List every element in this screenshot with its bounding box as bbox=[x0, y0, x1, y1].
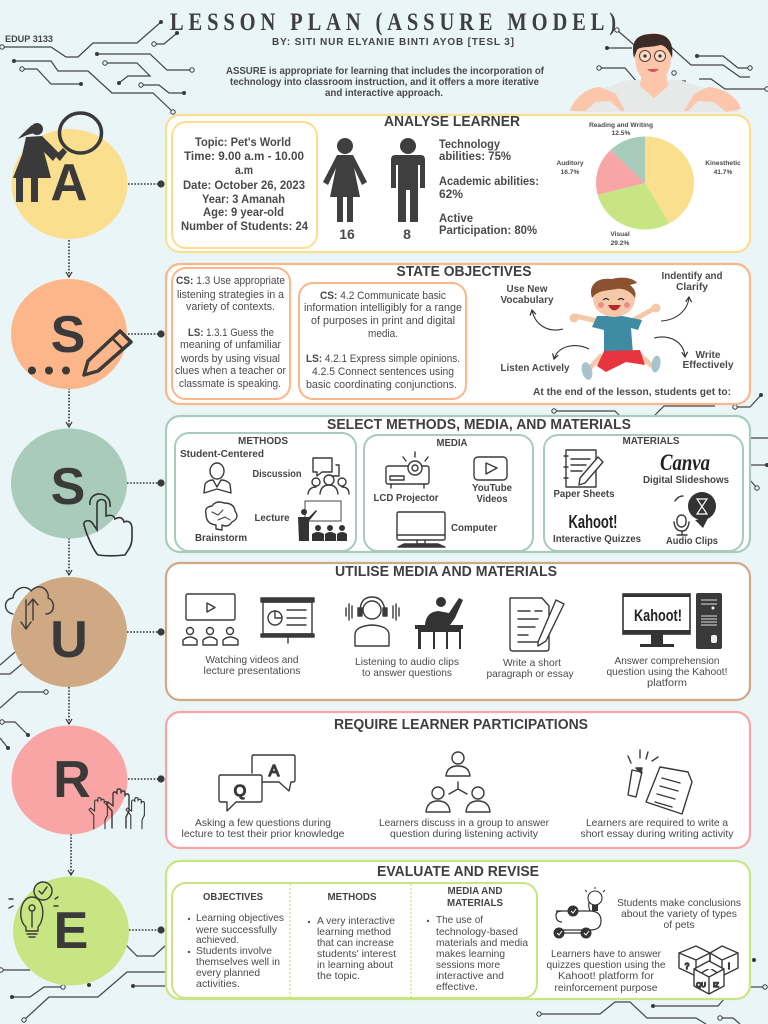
methods box: Student-Centered bbox=[180, 449, 264, 460]
pie chart: learning styles: 41.7% bbox=[714, 169, 732, 176]
objective labels: Vocabulary bbox=[500, 295, 554, 306]
evaluation table bbox=[172, 883, 537, 998]
learner abilities: 62% bbox=[439, 188, 463, 201]
icon: quiz cubes: ! bbox=[728, 962, 730, 971]
icon: projector bbox=[386, 452, 429, 488]
panel: evaluate and revise bbox=[166, 861, 750, 999]
methods box: Discussion bbox=[252, 469, 302, 480]
icon: male students 8 bbox=[391, 138, 425, 242]
column: objectives: OBJECTIVES bbox=[203, 892, 263, 903]
heading: UTILISE MEDIA AND MATERIALS bbox=[335, 564, 557, 580]
objective labels: Listen Actively bbox=[500, 363, 570, 374]
column: methods: students' interest bbox=[317, 949, 396, 960]
text: to answer questions bbox=[362, 668, 452, 679]
materials box: Interactive Quizzes bbox=[553, 534, 641, 545]
methods box: Lecture bbox=[254, 513, 290, 524]
objectives box 1: listening strategies in a bbox=[177, 289, 284, 301]
text bbox=[379, 818, 550, 840]
text: lecture to test their prior knowledge bbox=[182, 829, 345, 840]
column: media and materials: materials and media bbox=[436, 938, 528, 949]
text bbox=[580, 818, 734, 840]
media box bbox=[364, 435, 533, 551]
objectives box 2 bbox=[299, 283, 466, 399]
materials box: Audio Clips bbox=[666, 536, 718, 547]
icon: female students 16: 16 bbox=[339, 226, 355, 242]
column: objectives: Students involve bbox=[196, 946, 272, 957]
column: media and materials: sessions more bbox=[436, 960, 500, 971]
text: quizzes question using the bbox=[546, 960, 666, 971]
intro paragraph: ASSURE is appropriate for learning that includes the incorporation of bbox=[226, 66, 544, 77]
step S circle: state objectives: S bbox=[51, 306, 85, 364]
pie chart: learning styles: Auditory bbox=[556, 160, 584, 167]
intro paragraph bbox=[226, 66, 544, 99]
column: methods bbox=[308, 892, 396, 982]
pie chart: learning styles: Kinesthetic bbox=[705, 160, 741, 167]
text: of pets bbox=[664, 920, 694, 931]
objective labels: Indentify and bbox=[662, 271, 722, 282]
text: Answer comprehension bbox=[614, 656, 720, 667]
heading: STATE OBJECTIVES bbox=[396, 264, 532, 280]
icon: presentation board bbox=[261, 598, 314, 643]
objective labels: Write bbox=[696, 350, 721, 361]
column: objectives: themselves well in bbox=[196, 957, 280, 968]
intro paragraph: technology into classroom instruction, and it offers a more iterative bbox=[230, 77, 539, 88]
lesson details box: Date: October 26, 2023 bbox=[183, 179, 306, 192]
text: Learners are required to write a bbox=[586, 818, 728, 829]
intro paragraph: and interactive approach. bbox=[325, 88, 443, 99]
connector lines between circles bbox=[69, 180, 165, 934]
objective labels: Effectively bbox=[682, 360, 734, 371]
logo: Canva wordmark: Canva bbox=[660, 450, 710, 475]
text: paragraph or essay bbox=[486, 669, 574, 680]
lesson details box: Number of Students: 24 bbox=[181, 220, 309, 233]
icon: computer with Kahoot bbox=[623, 593, 722, 649]
icon: checklist path with bulb bbox=[554, 887, 605, 938]
logo: Kahoot wordmark: Kahoot! bbox=[568, 512, 618, 532]
objective labels: Use New bbox=[506, 284, 548, 295]
text: lecture presentations bbox=[204, 666, 300, 677]
step U circle: U bbox=[50, 611, 88, 669]
text: Students make conclusions bbox=[617, 898, 741, 909]
objectives box 2: 4.2.5 Connect sentences using bbox=[312, 366, 454, 378]
icon: student raising hand bbox=[415, 597, 463, 649]
icon: discussion group bbox=[426, 752, 490, 812]
objectives box 2: LS: 4.2.1 Express simple opinions. bbox=[306, 353, 460, 365]
text bbox=[355, 657, 459, 679]
text bbox=[486, 658, 574, 680]
methods box bbox=[175, 433, 356, 551]
icon: pencil and paper bbox=[628, 750, 692, 814]
objectives box 2: information intelligibly for a range bbox=[304, 302, 462, 314]
icon: video player bbox=[474, 457, 507, 480]
character: teacher pointing down bbox=[570, 33, 741, 112]
icon: quiz cubes: ? bbox=[685, 962, 690, 971]
lesson details box: Age: 9 year-old bbox=[203, 206, 284, 219]
lesson details box: Time: 9.00 a.m - 10.00 bbox=[184, 150, 304, 163]
objectives box 1: clues when a teacher or bbox=[175, 365, 286, 377]
icon: pencil with dots bbox=[28, 331, 131, 375]
icon: Q and A bubbles: Q bbox=[234, 783, 246, 800]
column: media and materials: makes learning bbox=[436, 949, 505, 960]
lesson details box: Year: 3 Amanah bbox=[202, 193, 285, 206]
pie chart: learning styles: 29.2% bbox=[611, 240, 629, 247]
icon: student reading bbox=[204, 463, 231, 493]
media box: MEDIA bbox=[436, 438, 468, 449]
column: objectives: activities. bbox=[196, 979, 240, 990]
column: media and materials: effective. bbox=[436, 982, 478, 993]
heading: ANALYSE LEARNER bbox=[384, 114, 520, 130]
objectives box 1: words by using visual bbox=[180, 353, 280, 365]
materials box bbox=[544, 435, 743, 551]
objectives box 2: CS: 4.2 Communicate basic bbox=[320, 290, 447, 302]
objectives box 1: CS: 1.3 Use appropriate bbox=[176, 275, 285, 287]
icon: computer with Kahoot: Kahoot! bbox=[634, 606, 682, 625]
media box: YouTube bbox=[472, 483, 512, 494]
media box: LCD Projector bbox=[374, 493, 439, 504]
materials box: Digital Slideshows bbox=[643, 475, 729, 486]
learner abilities: Active bbox=[439, 212, 474, 225]
panel: select methods, media, and materials bbox=[166, 416, 750, 552]
column: methods: in learning about bbox=[317, 960, 393, 971]
learner abilities: abilities: 75% bbox=[439, 150, 511, 163]
icon: cloud upload and download bbox=[6, 587, 53, 629]
column: methods: A very interactive bbox=[317, 916, 395, 927]
heading: EVALUATE AND REVISE bbox=[377, 864, 539, 880]
column: objectives: Learning objectives bbox=[196, 913, 284, 924]
text: reinforcement purpose bbox=[554, 983, 658, 994]
objectives box 1 bbox=[172, 268, 290, 399]
objective labels: Clarify bbox=[676, 282, 708, 293]
icon: paper and pencil bbox=[564, 450, 603, 487]
text bbox=[204, 655, 300, 677]
step S circle: select: S bbox=[51, 458, 85, 516]
learner abilities: Technology bbox=[439, 138, 501, 151]
text: Listening to audio clips bbox=[355, 657, 459, 668]
objectives box 1: meaning of unfamiliar bbox=[180, 339, 281, 351]
learner abilities bbox=[439, 138, 539, 237]
step S circle: select bbox=[11, 428, 132, 556]
icon: quiz cubes: QU bbox=[696, 982, 706, 989]
column: methods: the topic. bbox=[317, 971, 360, 982]
panel: require learner participations bbox=[166, 712, 750, 848]
pie chart: learning styles: 12.5% bbox=[612, 130, 630, 137]
icon: Q and A bubbles: A bbox=[269, 763, 280, 780]
step R circle: R bbox=[53, 751, 91, 809]
panel: utilise media and materials bbox=[166, 563, 750, 700]
column: media and materials: MEDIA AND bbox=[448, 886, 502, 897]
objectives box 2: basic coordinating conjunctions. bbox=[306, 379, 457, 391]
icon: quiz cubes: IZ bbox=[713, 982, 719, 989]
column: media and materials bbox=[427, 886, 528, 993]
materials box: MATERIALS bbox=[622, 436, 680, 447]
step E circle bbox=[9, 876, 129, 986]
text: about the variety of types bbox=[621, 909, 737, 920]
column: methods: METHODS bbox=[328, 892, 377, 903]
step S circle: state objectives bbox=[11, 279, 131, 389]
icon: person with magnifier bbox=[13, 113, 102, 202]
objective labels: At the end of the lesson, students get to: bbox=[533, 387, 731, 398]
author line: BY: SITI NUR ELYANIE BINTI AYOB [TESL 3] bbox=[272, 37, 514, 48]
icon: light bulb with check bbox=[9, 882, 58, 937]
text: Write a short bbox=[503, 658, 561, 669]
column: methods: that can increase bbox=[317, 938, 394, 949]
media box: Videos bbox=[476, 494, 508, 505]
column: methods: learning method bbox=[317, 927, 391, 938]
icon: audio clip bbox=[674, 492, 716, 535]
methods box: METHODS bbox=[238, 436, 288, 447]
column: media and materials: MATERIALS bbox=[447, 898, 503, 909]
icon: female students 16 bbox=[323, 138, 367, 242]
objectives box 1: variety of contexts. bbox=[186, 301, 275, 313]
heading: REQUIRE LEARNER PARTICIPATIONS bbox=[334, 717, 588, 733]
lesson details box: a.m bbox=[235, 164, 253, 177]
text: question using the Kahoot! bbox=[606, 667, 728, 678]
text: platform bbox=[647, 678, 687, 689]
step A circle bbox=[12, 113, 128, 239]
lesson details box: Topic: Pet's World bbox=[195, 136, 291, 149]
course code: EDUP 3133 bbox=[5, 34, 53, 44]
icon: raised hands bbox=[89, 789, 144, 829]
panel: analyse learner bbox=[166, 114, 750, 252]
icon: quiz cubes bbox=[679, 946, 738, 994]
column: media and materials: technology-based bbox=[436, 927, 518, 938]
objectives box 2: of purposes in print and digital bbox=[311, 315, 455, 327]
lesson details box bbox=[172, 122, 317, 248]
pie chart: learning styles: Visual bbox=[610, 231, 630, 238]
objectives box 1: LS: 1.3.1 Guess the bbox=[188, 327, 274, 339]
step U circle bbox=[6, 577, 127, 687]
heading: SELECT METHODS, MEDIA, AND MATERIALS bbox=[327, 417, 631, 433]
column: media and materials: interactive and bbox=[436, 971, 504, 982]
column: objectives: were successfully bbox=[195, 925, 278, 936]
step A circle: A bbox=[50, 154, 88, 212]
icon: lecture bbox=[298, 501, 347, 541]
methods box: Brainstorm bbox=[195, 533, 247, 544]
column: objectives: every planned bbox=[196, 968, 260, 979]
learner abilities: Academic abilities: bbox=[439, 175, 539, 188]
text: Learners discuss in a group to answer bbox=[379, 818, 550, 829]
materials box: Paper Sheets bbox=[554, 489, 615, 500]
pie chart: learning styles bbox=[556, 122, 741, 247]
text bbox=[546, 949, 666, 994]
icon: video with audience bbox=[183, 594, 238, 645]
objectives box 2: media. bbox=[368, 328, 398, 340]
text: question during listening activity bbox=[390, 829, 539, 840]
icon: pointing hand bbox=[84, 494, 132, 556]
objective labels bbox=[500, 271, 734, 398]
column: media and materials: The use of bbox=[436, 915, 483, 926]
icon: listening with headphones bbox=[346, 597, 399, 646]
media box: Computer bbox=[451, 523, 497, 534]
text: Kahoot! platform for bbox=[558, 971, 655, 982]
icon: Q and A bubbles bbox=[219, 755, 295, 811]
pie chart: learning styles: 16.7% bbox=[561, 169, 579, 176]
text: Watching videos and bbox=[206, 655, 299, 666]
step E circle: E bbox=[54, 902, 88, 960]
icon: document and pen bbox=[510, 598, 564, 651]
title: LESSON PLAN (ASSURE MODEL) bbox=[170, 8, 616, 35]
icon: computer bbox=[397, 512, 445, 547]
icon: group discussion bbox=[308, 458, 349, 494]
icon: jumping child bbox=[570, 278, 662, 381]
objectives box 1: classmate is speaking. bbox=[179, 378, 281, 390]
text: Learners have to answer bbox=[551, 949, 662, 960]
column: objectives bbox=[188, 892, 284, 990]
text: Asking a few questions during bbox=[195, 818, 331, 829]
text: short essay during writing activity bbox=[580, 829, 734, 840]
icon: male students 8: 8 bbox=[403, 226, 411, 242]
panel: state objectives bbox=[166, 264, 750, 404]
learner abilities: Participation: 80% bbox=[439, 224, 537, 237]
pie chart: learning styles: Reading and Writing bbox=[589, 122, 653, 129]
icon: brain bbox=[206, 502, 237, 530]
text bbox=[617, 898, 741, 931]
text bbox=[606, 656, 728, 689]
text bbox=[182, 818, 345, 840]
step R circle bbox=[12, 726, 144, 834]
arrows around child bbox=[532, 297, 689, 359]
column: objectives: achieved. bbox=[196, 935, 239, 946]
